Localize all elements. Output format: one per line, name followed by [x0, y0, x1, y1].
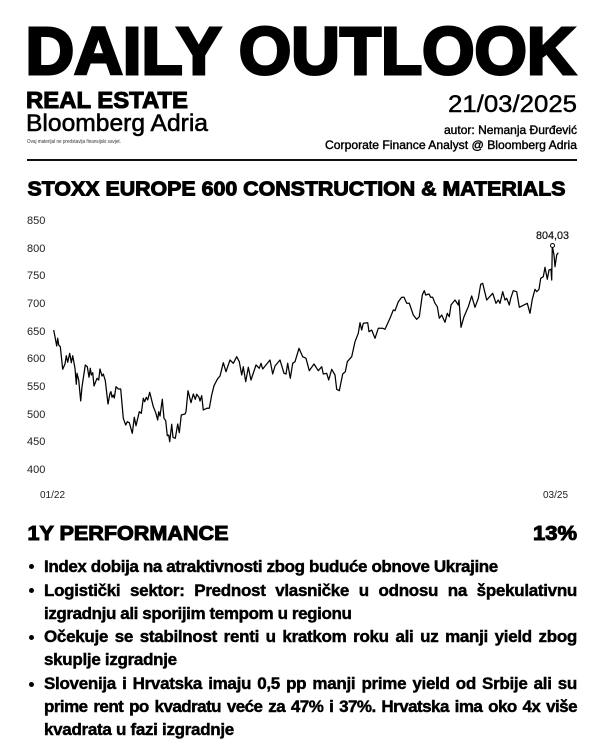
disclaimer: Ovaj materijal ne predstavlja finansijski savjet.: [27, 139, 121, 145]
bullet marker 1: [28, 564, 34, 568]
chart heading: STOXX EUROPE 600 CONSTRUCTION & MATERIALS: [28, 178, 566, 200]
line chart: [27, 215, 569, 501]
subtitle: Bloomberg Adria: Bloomberg Adria: [26, 110, 209, 137]
header divider: [27, 159, 577, 161]
bullet text 1: Index dobija na atraktivnosti zbog buduće obnove Ukrajine: [44, 556, 498, 576]
y axis labels: 850: [27, 215, 45, 227]
y axis labels: 650: [27, 326, 45, 338]
bullet marker 2: [28, 588, 34, 592]
bullet text 4 line 1: Slovenija i Hrvatska imaju 0,5 pp manji prime yield od Srbije ali su: [44, 674, 577, 693]
y axis labels: 500: [27, 409, 45, 421]
y axis labels: [27, 215, 45, 476]
bullet text 4 line 2: prime rent po kvadratu veće za 47% i 37%. Hrvatska ima oko 4x više: [44, 697, 577, 716]
bullet text 2 line 1: Logistički sektor: Prednost vlasničke u odnosu na špekulativnu: [44, 580, 577, 600]
author role: Corporate Finance Analyst @ Bloomberg Adria: [325, 138, 577, 152]
bullet marker 4: [28, 682, 34, 686]
index line: [54, 246, 558, 442]
peak label: 804,03: [536, 230, 569, 242]
bullet text 3 line 1: Očekuje se stabilnost renti u kratkom roku ali uz manji yield zbog: [44, 627, 577, 646]
y axis labels: 450: [27, 436, 45, 448]
title: DAILY OUTLOOK: [26, 14, 576, 89]
y axis labels: 750: [27, 270, 45, 282]
bullet text 3 line 2: skuplje izgradnje: [44, 650, 177, 668]
bullet text 2 line 2: izgradnju ali sporijim tempom u regionu: [44, 604, 351, 622]
y axis labels: 700: [27, 298, 45, 310]
performance heading: 1Y PERFORMANCE: [28, 522, 228, 545]
bullet list: [29, 556, 578, 739]
performance value: 13%: [533, 522, 577, 545]
y axis labels: 800: [27, 243, 45, 255]
y axis labels: 550: [27, 381, 45, 393]
date: 21/03/2025: [448, 91, 577, 118]
peak marker: [550, 244, 554, 248]
author: autor: Nemanja Đurđević: [444, 123, 577, 137]
bullet text 4 line 3: kvadrata u fazi izgradnje: [44, 720, 234, 739]
x axis labels: [40, 490, 568, 501]
x axis labels: 03/25: [543, 490, 568, 501]
y axis labels: 600: [27, 353, 45, 365]
subtitle: real estate: REAL ESTATE: [26, 87, 188, 113]
x axis labels: 01/22: [40, 490, 65, 501]
bullet marker 3: [28, 634, 34, 640]
y axis labels: 400: [27, 464, 45, 476]
